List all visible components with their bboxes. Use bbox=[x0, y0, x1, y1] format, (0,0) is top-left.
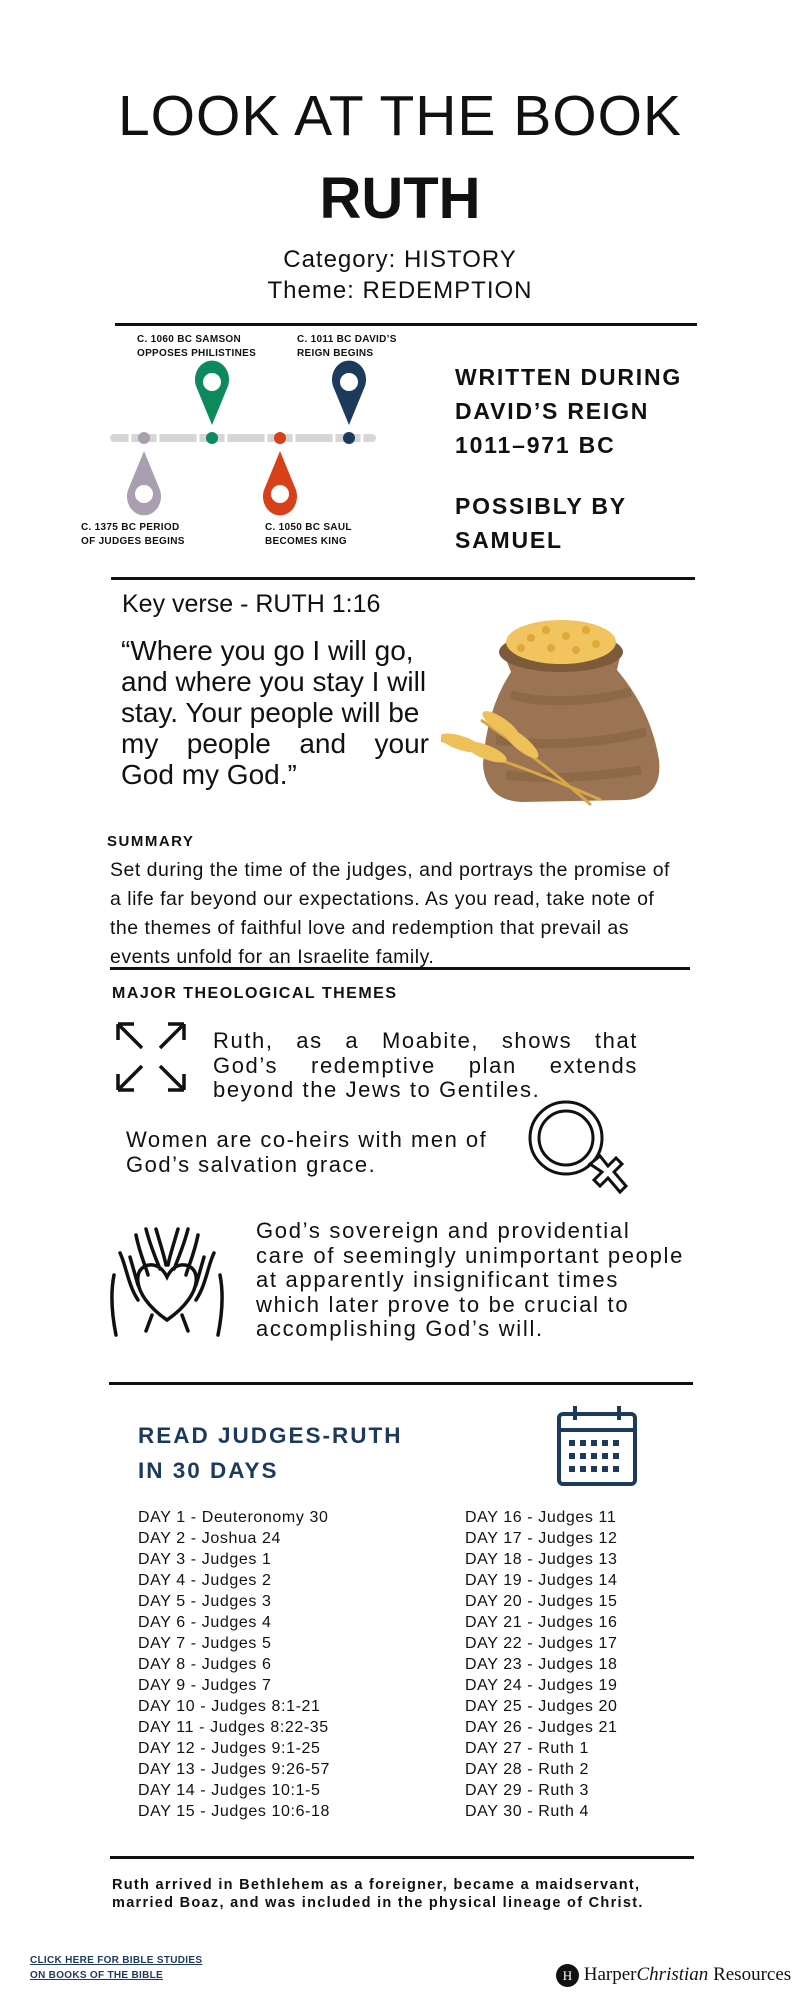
pin red bbox=[263, 451, 297, 515]
text: REIGN BEGINS bbox=[297, 348, 373, 359]
theme 2 text bbox=[126, 1127, 487, 1177]
text: C. 1050 BC SAUL bbox=[265, 522, 352, 533]
timeline labels: OPPOSES PHILISTINES bbox=[137, 348, 256, 359]
reading list left: DAY 7 - Judges 5 bbox=[138, 1635, 272, 1652]
summary text: a life far beyond our expectations. As you read, take note of bbox=[110, 888, 654, 910]
icon: female symbol bbox=[528, 1100, 628, 1194]
theme 3 text: God’s sovereign and providential bbox=[256, 1218, 630, 1243]
reading list left: DAY 4 - Judges 2 bbox=[138, 1572, 272, 1589]
reading list right: DAY 28 - Ruth 2 bbox=[465, 1761, 589, 1778]
theme 1 text: Ruth, as a Moabite, shows that bbox=[213, 1028, 638, 1053]
reading list left: DAY 10 - Judges 8:1-21 bbox=[138, 1698, 320, 1715]
reading list left bbox=[138, 1509, 330, 1820]
quote: “Where you go I will go, bbox=[121, 635, 414, 666]
reading list left: DAY 8 - Judges 6 bbox=[138, 1656, 272, 1673]
reading list right: DAY 25 - Judges 20 bbox=[465, 1698, 618, 1715]
reading list right bbox=[465, 1509, 618, 1820]
theme 1 text: God’s redemptive plan extends bbox=[213, 1052, 638, 1078]
summary text bbox=[110, 859, 670, 968]
logo: HarperChristian Resources bbox=[584, 1964, 791, 1985]
text: OF JUDGES BEGINS bbox=[81, 536, 185, 547]
icon: calendar bbox=[557, 1406, 637, 1486]
pin purple bbox=[127, 451, 161, 515]
reading list left: DAY 13 - Judges 9:26-57 bbox=[138, 1761, 330, 1778]
timeline bbox=[110, 360, 376, 516]
reading list right: DAY 29 - Ruth 3 bbox=[465, 1782, 589, 1799]
reading list left: DAY 5 - Judges 3 bbox=[138, 1593, 272, 1610]
reading list left: DAY 2 - Joshua 24 bbox=[138, 1530, 281, 1547]
theme 3 text bbox=[256, 1218, 684, 1341]
book name: RUTH bbox=[319, 166, 481, 231]
reading list right: DAY 17 - Judges 12 bbox=[465, 1530, 618, 1547]
reading plan heading: IN 30 DAYS bbox=[138, 1458, 278, 1483]
footer link: CLICK HERE FOR BIBLE STUDIES bbox=[30, 1955, 202, 1966]
reading list right: DAY 27 - Ruth 1 bbox=[465, 1740, 589, 1757]
reading list right: DAY 22 - Judges 17 bbox=[465, 1635, 618, 1652]
category and theme: Category: HISTORY bbox=[283, 246, 517, 273]
quote: my people and your bbox=[121, 728, 429, 759]
theme 1 text: beyond the Jews to Gentiles. bbox=[213, 1077, 540, 1102]
theme 2 text: Women are co-heirs with men of bbox=[126, 1127, 487, 1152]
reading list right: DAY 18 - Judges 13 bbox=[465, 1551, 618, 1568]
reading list right: DAY 26 - Judges 21 bbox=[465, 1719, 618, 1736]
reading list right: DAY 20 - Judges 15 bbox=[465, 1593, 618, 1610]
author: POSSIBLY BY bbox=[455, 493, 627, 519]
written during bbox=[455, 364, 682, 458]
written during: WRITTEN DURING bbox=[455, 364, 682, 390]
pin green bbox=[195, 361, 229, 425]
logo: H bbox=[563, 1968, 572, 1983]
summary text: Set during the time of the judges, and portrays the promise of bbox=[110, 859, 670, 881]
text: C. 1011 BC DAVID’S bbox=[297, 334, 397, 345]
reading list right: DAY 19 - Judges 14 bbox=[465, 1572, 618, 1589]
closing note: Ruth arrived in Bethlehem as a foreigner, became a maidservant, bbox=[112, 1877, 640, 1893]
timeline labels: C. 1060 BC SAMSON bbox=[137, 334, 241, 345]
reading list left: DAY 1 - Deuteronomy 30 bbox=[138, 1509, 328, 1526]
closing note: married Boaz, and was included in the physical lineage of Christ. bbox=[112, 1895, 644, 1911]
author: SAMUEL bbox=[455, 527, 563, 553]
reading list right: DAY 21 - Judges 16 bbox=[465, 1614, 618, 1631]
theme 2 text: God’s salvation grace. bbox=[126, 1152, 376, 1177]
key verse heading: Key verse - RUTH 1:16 bbox=[122, 590, 380, 618]
reading list left: DAY 12 - Judges 9:1-25 bbox=[138, 1740, 320, 1757]
reading list right: DAY 24 - Judges 19 bbox=[465, 1677, 618, 1694]
summary text: events unfold for an Israelite family. bbox=[110, 946, 434, 968]
category and theme: Theme: REDEMPTION bbox=[267, 277, 533, 304]
reading list right: DAY 30 - Ruth 4 bbox=[465, 1803, 589, 1820]
reading plan heading bbox=[138, 1423, 403, 1483]
theme 1 text bbox=[213, 1028, 638, 1102]
themes heading: MAJOR THEOLOGICAL THEMES bbox=[112, 985, 398, 1002]
reading list left: DAY 11 - Judges 8:22-35 bbox=[138, 1719, 329, 1736]
icon: expand arrows bbox=[116, 1022, 186, 1092]
closing note bbox=[112, 1877, 644, 1911]
reading plan heading: READ JUDGES-RUTH bbox=[138, 1423, 403, 1448]
reading list left: DAY 15 - Judges 10:6-18 bbox=[138, 1803, 330, 1820]
theme 3 text: accomplishing God’s will. bbox=[256, 1316, 544, 1341]
theme 3 text: care of seemingly unimportant people bbox=[256, 1242, 684, 1268]
summary heading: SUMMARY bbox=[107, 833, 194, 850]
author bbox=[455, 493, 627, 553]
reading list left: DAY 6 - Judges 4 bbox=[138, 1614, 272, 1631]
reading list left: DAY 3 - Judges 1 bbox=[138, 1551, 272, 1568]
reading list left: DAY 14 - Judges 10:1-5 bbox=[138, 1782, 320, 1799]
text: BECOMES KING bbox=[265, 536, 347, 547]
timeline labels bbox=[137, 334, 256, 359]
written during: DAVID’S REIGN bbox=[455, 398, 649, 424]
icon: grain sack with wheat bbox=[441, 620, 660, 806]
written during: 1011–971 BC bbox=[455, 432, 615, 458]
category and theme bbox=[267, 246, 533, 304]
quote bbox=[121, 635, 429, 790]
summary text: the themes of faithful love and redemption that prevail as bbox=[110, 917, 629, 939]
reading list right: DAY 16 - Judges 11 bbox=[465, 1509, 616, 1526]
icon: hands with heart bbox=[110, 1227, 224, 1337]
theme 3 text: which later prove to be crucial to bbox=[256, 1292, 629, 1316]
quote: God my God.” bbox=[121, 759, 297, 790]
quote: stay. Your people will be bbox=[121, 697, 419, 728]
reading list right: DAY 23 - Judges 18 bbox=[465, 1656, 618, 1673]
reading list left: DAY 9 - Judges 7 bbox=[138, 1677, 272, 1694]
theme 3 text: at apparently insignificant times bbox=[256, 1267, 619, 1292]
title: LOOK AT THE BOOK bbox=[118, 84, 682, 148]
footer link: ON BOOKS OF THE BIBLE bbox=[30, 1970, 163, 1981]
footer link bbox=[30, 1955, 202, 1981]
text: C. 1375 BC PERIOD bbox=[81, 522, 179, 533]
quote: and where you stay I will bbox=[121, 666, 426, 697]
pin navy bbox=[332, 361, 366, 425]
